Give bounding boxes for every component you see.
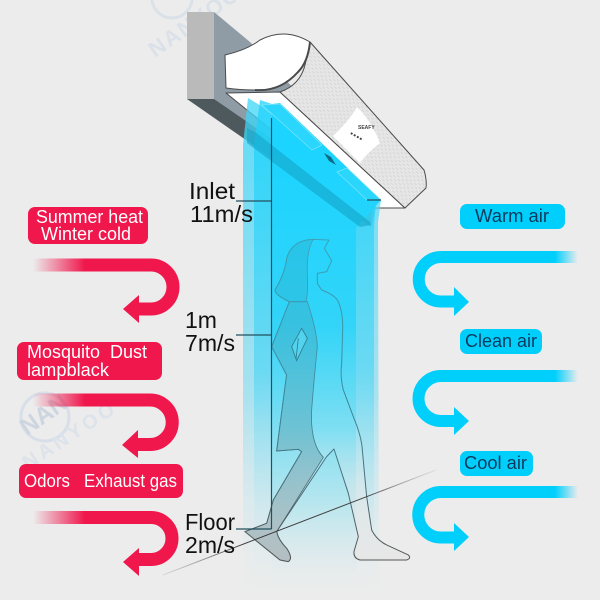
red label: odors: Odors Exhaust gas [24,471,177,491]
dress and rear leg [245,302,323,562]
red label: summer heat: Summer heat [36,207,143,227]
measure lines [236,118,381,529]
blue arrow 1 [419,257,578,316]
red label: summer heat [28,207,148,244]
label: inlet speed [189,178,253,227]
red arrow 3 [33,518,172,576]
blue label: warm air: Warm air [475,206,549,226]
label: 1m speed [185,307,235,356]
air curtain [243,98,381,590]
label: floor speed: Floor [185,509,235,535]
red label: mosquito dust: lampblack [27,360,110,380]
red label: odors [19,464,183,498]
watermark: middle: NANYOO [19,399,119,474]
label: 1m speed: 7m/s [185,330,235,356]
blue label: warm air [460,204,565,229]
red label: mosquito dust [17,342,162,380]
label: floor speed: 2m/s [185,532,235,558]
watermark: middle: NAN [15,389,73,441]
red arrow 2 [33,400,172,458]
air curtain end cap [225,34,310,90]
label: inlet speed: 11m/s [190,201,253,227]
person silhouette [245,239,410,562]
blue arrow 2 [418,376,578,435]
floor line [163,470,436,575]
blue label: clean air: Clean air [465,331,537,351]
hand bag [292,328,307,361]
icon: brand logo: SEAFY [358,125,375,131]
hair [275,239,313,302]
label: 1m speed: 1m [185,307,217,333]
blue label: cool air [460,451,533,476]
red label: mosquito dust: Mosquito Dust [27,342,147,362]
label: floor speed [185,509,235,558]
icon: brand logo: ■ ■ ■ ■ [350,131,364,142]
blue label: cool air: Cool air [464,453,527,473]
air curtain unit body [226,42,426,208]
label: inlet speed: Inlet [189,178,236,204]
wall beam [187,12,380,227]
icon: brand logo [350,125,375,142]
red label: summer heat: Winter cold [41,224,131,244]
red arrow 1 [33,265,173,323]
blue arrow 3 [418,492,578,551]
